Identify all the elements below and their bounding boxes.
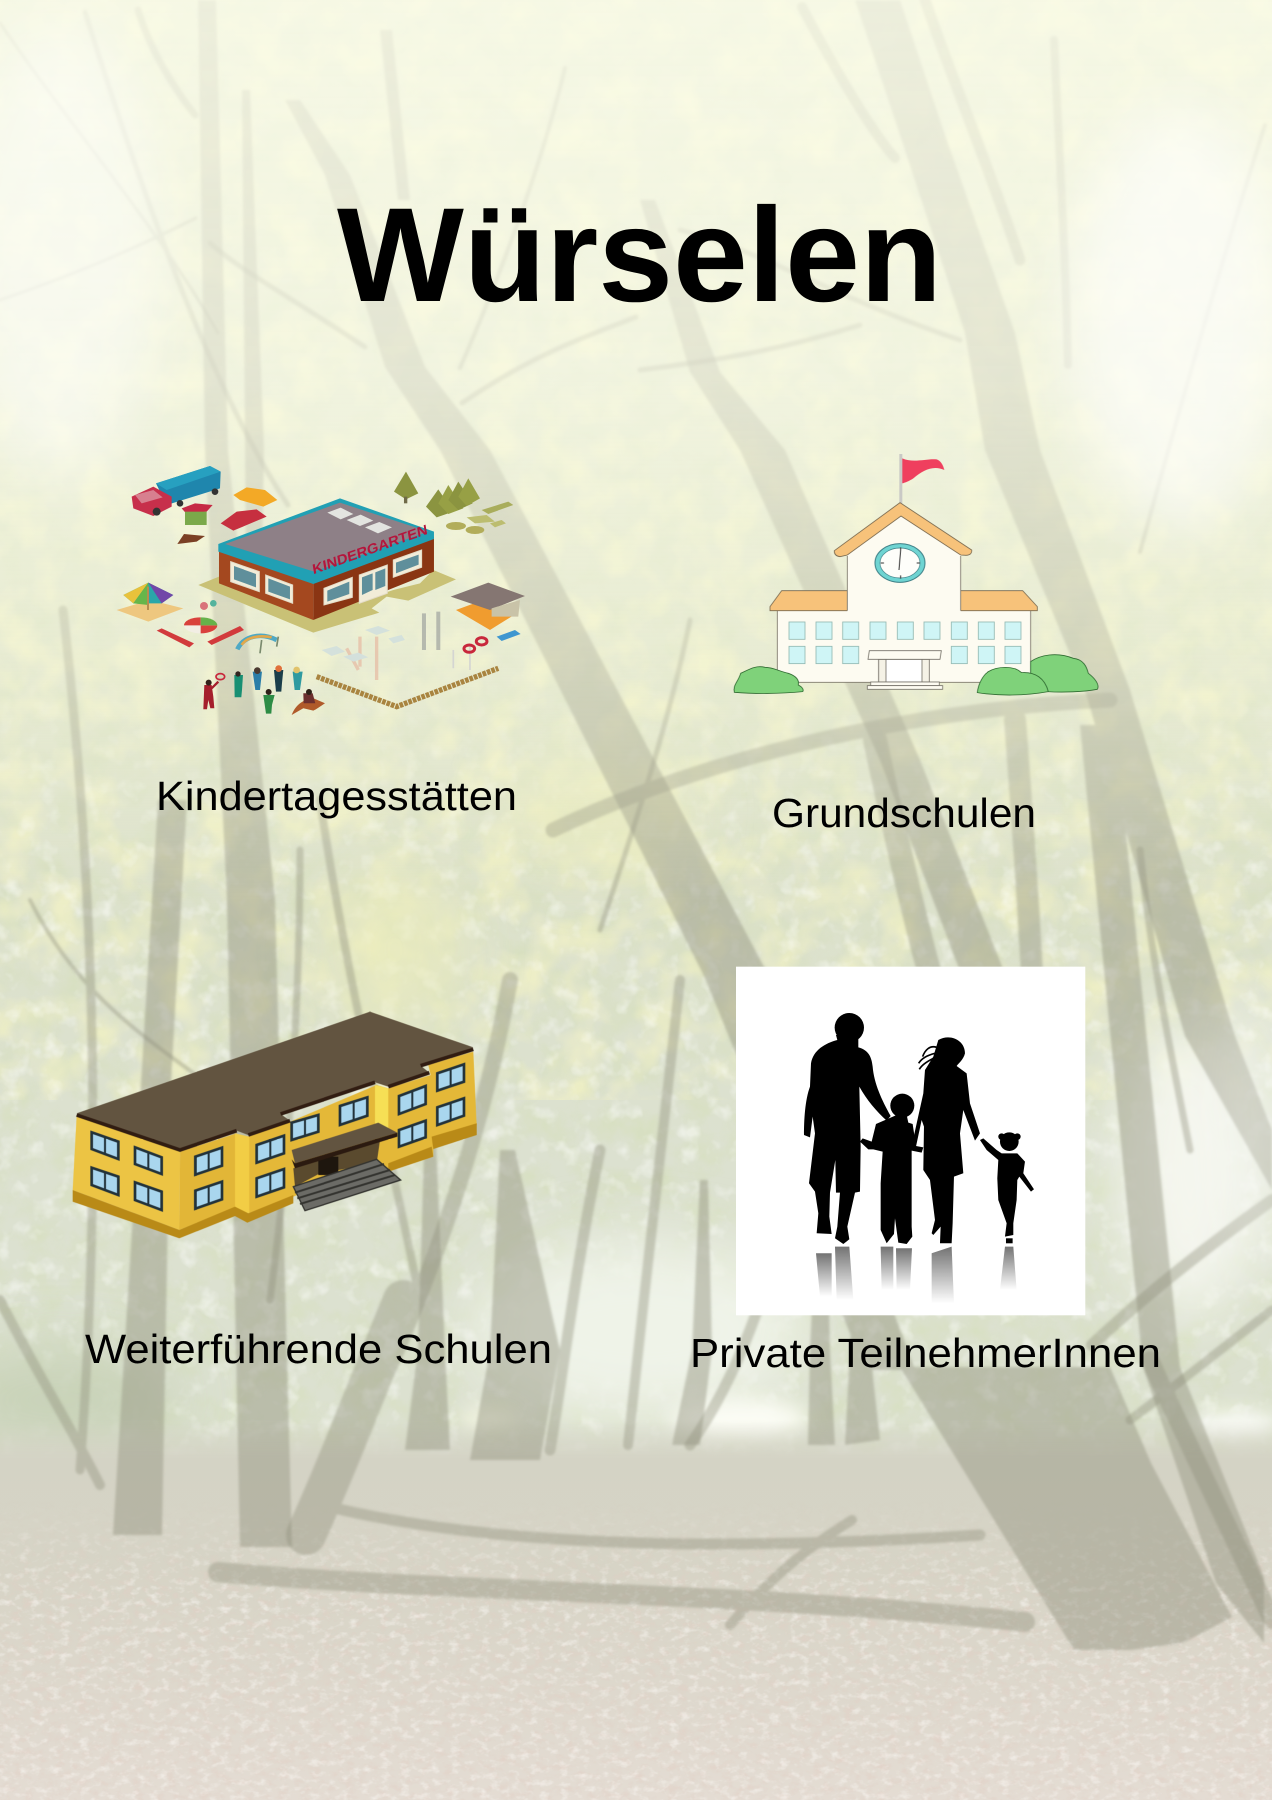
icon: elementary school bbox=[734, 454, 1098, 695]
icon: faded poles and signs bbox=[322, 612, 470, 680]
icon: secondary school building bbox=[73, 1012, 477, 1238]
label: Kindertagesstätten: Kindertagesstätten bbox=[156, 773, 517, 819]
window mullions bbox=[105, 1069, 451, 1205]
icon: shelter bbox=[451, 583, 525, 641]
icon: group of people bbox=[203, 665, 325, 715]
wing roofs bbox=[770, 591, 1037, 611]
reflection bbox=[816, 1247, 1017, 1303]
boy bbox=[860, 1094, 923, 1244]
roof bbox=[77, 1012, 473, 1149]
windows bbox=[92, 1064, 464, 1210]
girl bbox=[980, 1132, 1034, 1243]
icon: playground equipment bbox=[157, 600, 278, 653]
walls bbox=[73, 1115, 180, 1230]
white panel bbox=[736, 967, 1085, 1315]
wings bbox=[777, 610, 1031, 682]
icon: sandbox with parasol bbox=[117, 583, 183, 622]
father bbox=[804, 1013, 891, 1244]
mother bbox=[913, 1037, 980, 1243]
icon: family silhouette on white square bbox=[736, 967, 1085, 1315]
clock tower bbox=[834, 503, 972, 613]
label: Grundschulen: Grundschulen bbox=[772, 790, 1036, 836]
steps bbox=[293, 1159, 401, 1211]
icon: trees and benches bbox=[394, 472, 513, 534]
portico bbox=[293, 1140, 380, 1187]
icon: truck bbox=[132, 466, 221, 516]
plinth bbox=[73, 1190, 293, 1238]
icon: fence bbox=[317, 668, 498, 707]
icon: bushes bbox=[734, 655, 1098, 695]
label: Weiterführende Schulen: Weiterführende Schulen bbox=[85, 1326, 552, 1372]
entrance bbox=[867, 651, 943, 689]
title: Würselen bbox=[337, 181, 942, 330]
label: Private TeilnehmerInnen: Private TeilnehmerInnen bbox=[690, 1330, 1161, 1376]
windows bbox=[789, 622, 1021, 664]
icon: kindergarten building bbox=[198, 498, 456, 633]
eaves bbox=[77, 1049, 473, 1150]
icon: red signs bbox=[464, 638, 487, 652]
icon: flag bbox=[899, 454, 944, 504]
icon: cars and kiosk bbox=[177, 487, 277, 544]
icon: kindergarten scene bbox=[117, 466, 525, 715]
sign: KINDERGARTEN: KINDERGARTEN bbox=[311, 522, 429, 577]
